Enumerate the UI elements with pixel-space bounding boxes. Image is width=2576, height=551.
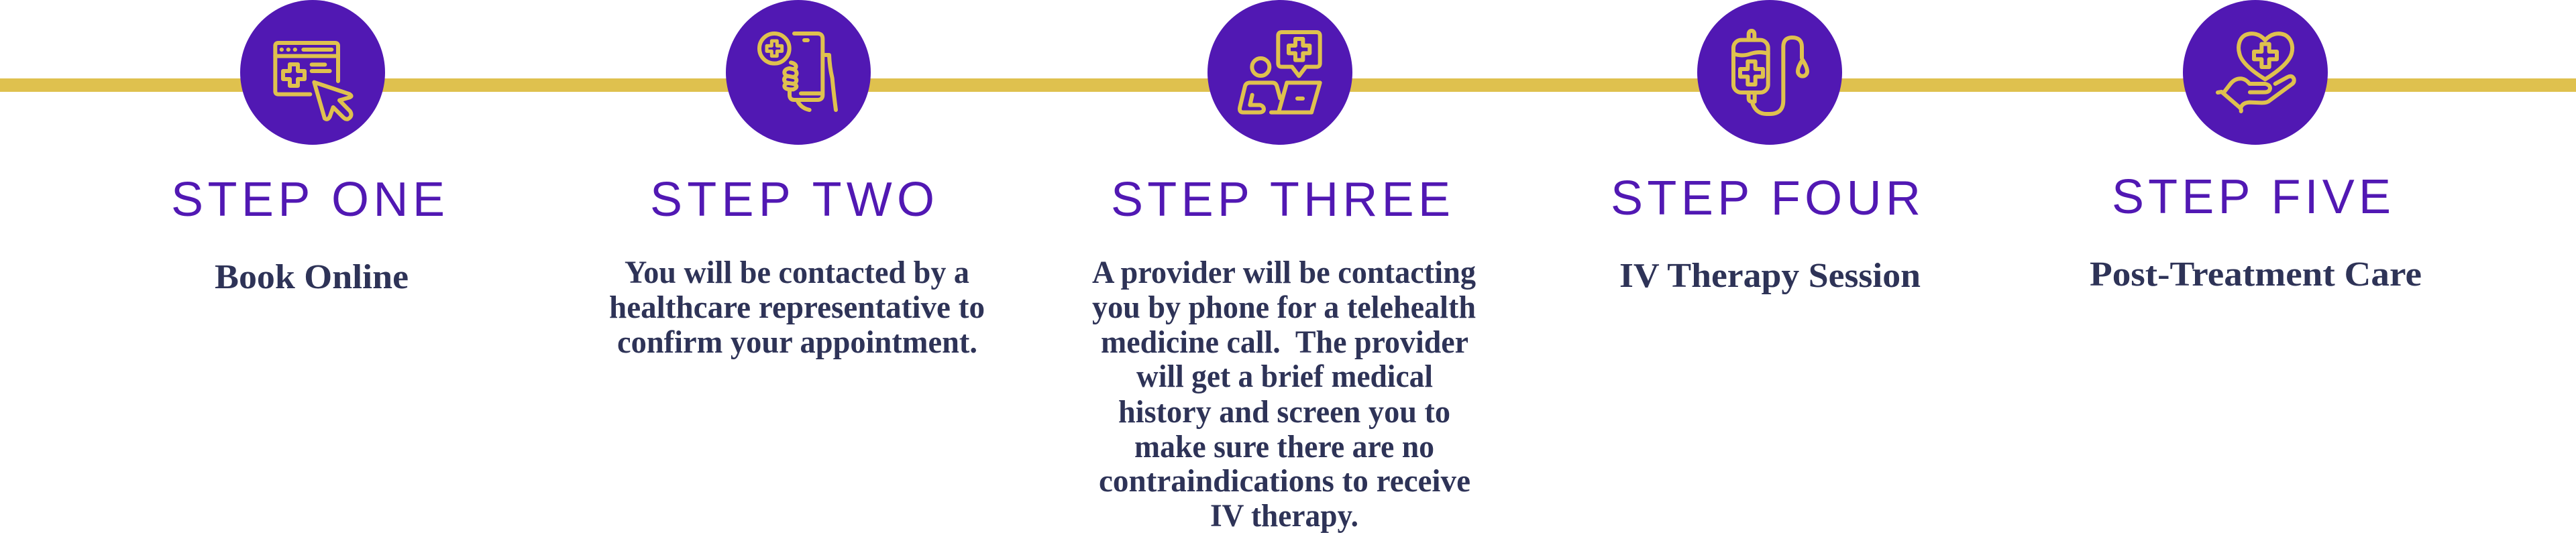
panel: step two [609, 0, 985, 360]
icon: IV bag [1733, 31, 1807, 114]
heading: step three: STEP THREE [1111, 173, 1450, 227]
heading: step five: STEP FIVE [2112, 170, 2391, 224]
icon circle: step one [240, 0, 385, 145]
panel: step one [171, 0, 445, 296]
icon: hand holding phone [759, 34, 836, 110]
icon: browser with cursor [275, 43, 352, 119]
icon: hand holding heart [2218, 34, 2294, 111]
icon: telehealth on laptop [1240, 32, 1320, 113]
text: step three description: will get a brief medical [1136, 359, 1433, 394]
text: step two description: You will be contacted by a [625, 255, 969, 290]
text: step three description: history and screen you to [1118, 394, 1450, 430]
panel: step five [2090, 0, 2422, 294]
icon circle: step two [726, 0, 871, 145]
text: step two description [609, 255, 985, 360]
icon circle: step four [1697, 0, 1842, 145]
text: step three description [1092, 255, 1476, 534]
text: book online: Book Online [215, 258, 409, 296]
text: step three description: contraindications to receive [1099, 463, 1470, 499]
text: step three description: medicine call. The provider [1101, 324, 1468, 360]
panel: step three [1092, 0, 1476, 534]
text: post-treatment care: Post-Treatment Care [2090, 255, 2422, 294]
icon circle: step five [2183, 0, 2328, 145]
text: step two description: confirm your appointment. [617, 324, 977, 360]
text: step three description: make sure there are no [1134, 429, 1434, 465]
text: step two description: healthcare representative to [609, 290, 985, 325]
heading: step two: STEP TWO [650, 173, 934, 227]
text: step three description: IV therapy. [1210, 498, 1358, 534]
text: IV therapy session: IV Therapy Session [1619, 257, 1921, 295]
panel: step four [1611, 0, 1921, 295]
heading: step four: STEP FOUR [1611, 172, 1921, 225]
text: step three description: you by phone for a telehealth [1092, 290, 1476, 325]
connector line [0, 78, 2576, 92]
heading: step one: STEP ONE [171, 173, 445, 227]
text: step three description: A provider will be contacting [1092, 255, 1476, 290]
icon circle: step three [1208, 0, 1352, 145]
